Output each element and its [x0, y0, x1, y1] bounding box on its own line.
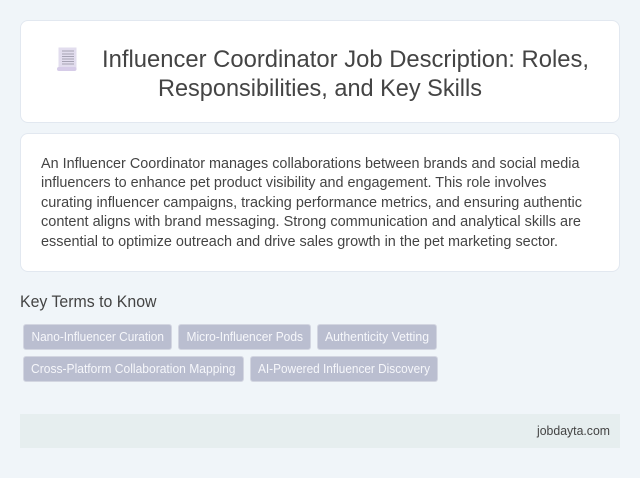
heading: key terms: Key Terms to Know [20, 293, 157, 311]
panel: description card [20, 134, 620, 272]
text block: description: curating influencer campaigns, tracking performance metrics, and ensuring authentic [41, 195, 583, 211]
title: Influencer Coordinator Job Description: Roles, [102, 46, 589, 73]
title [102, 46, 589, 102]
tag: cross-platform collaboration mapping: Cross-Platform Collaboration Mapping [31, 361, 236, 376]
tag: micro-influencer pods [178, 324, 310, 350]
text block: description: content aligns with brand messaging. Strong communication and analytical skills are [41, 214, 581, 230]
tag list: key terms [24, 324, 438, 382]
tag: authenticity vetting: Authenticity Vetting [325, 329, 429, 344]
tag: ai-powered influencer discovery [250, 356, 438, 382]
text block: description: essential to optimize outreach and drive sales growth in the pet marketing sector. [41, 234, 558, 250]
footer bar [20, 414, 620, 448]
tag: micro-influencer pods: Micro-Influencer Pods [186, 329, 303, 344]
tag: nano-influencer curation: Nano-Influencer Curation [32, 329, 164, 344]
panel: title card [20, 20, 620, 122]
icon: document scroll [57, 48, 76, 71]
tag: ai-powered influencer discovery: AI-Powered Influencer Discovery [258, 361, 430, 376]
tag: authenticity vetting [318, 324, 436, 350]
tag: cross-platform collaboration mapping [24, 356, 244, 382]
tag: nano-influencer curation [24, 324, 172, 350]
text block: description: An Influencer Coordinator manages collaborations between brands and social media [41, 156, 580, 172]
text block: description: influencers to enhance pet product visibility and engagement. This role involves [41, 175, 546, 191]
title: Responsibilities, and Key Skills [158, 75, 482, 102]
text block: description [41, 156, 583, 250]
footer source text: jobdayta.com [536, 424, 610, 438]
